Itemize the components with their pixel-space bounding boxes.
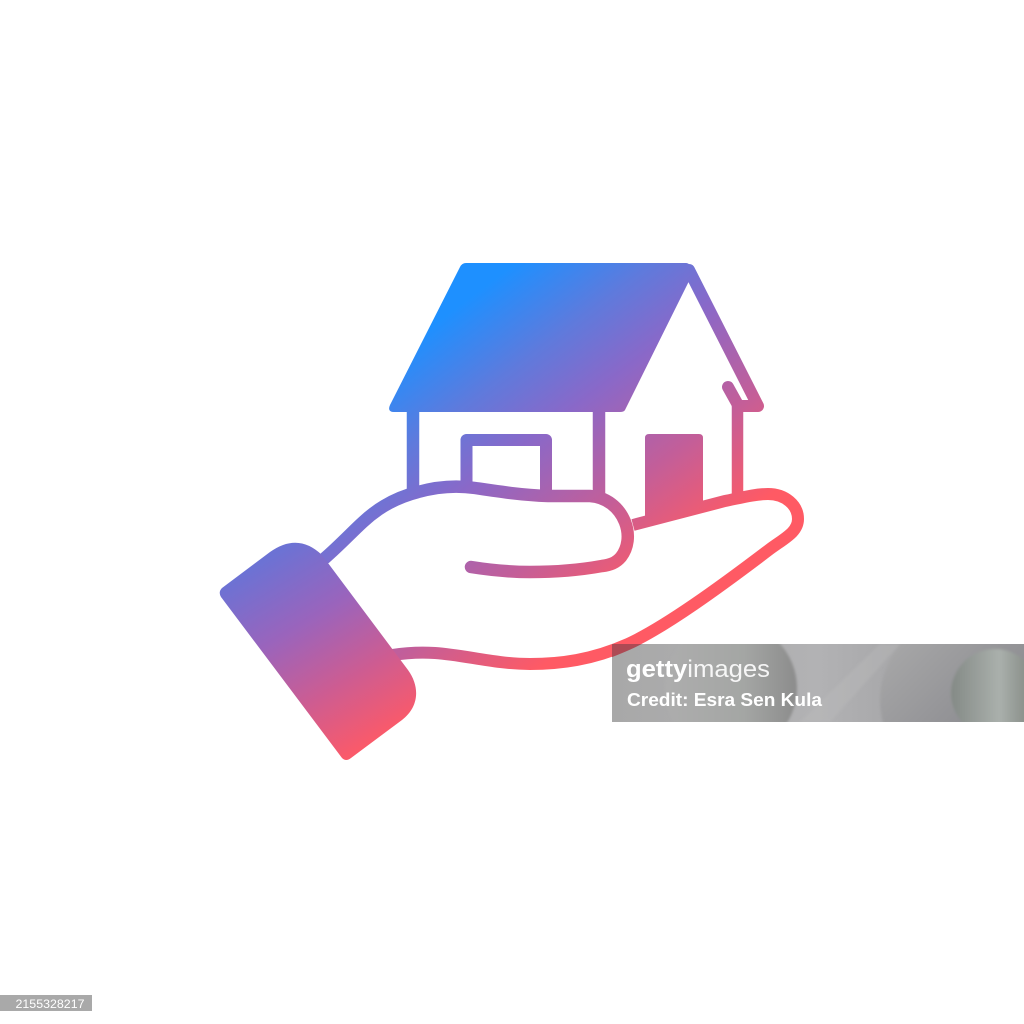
image id tag: 2155328217 [16,997,85,1011]
watermark panel [612,644,1024,722]
watermark background [612,644,1024,722]
house front door [645,434,703,520]
house roof [389,263,694,412]
watermark credit text: Credit: Esra Sen Kula [627,690,823,710]
shirt cuff [220,543,416,760]
house right gable and eave [689,270,758,406]
watermark logo text: gettyimages [626,656,770,683]
hand upper outline and thumb [325,487,628,572]
house chimney notch [728,387,738,405]
icon: hand holding house [220,263,798,760]
house middle wall [593,410,605,498]
house right wall [732,404,743,498]
house left wall [407,410,419,492]
image id tag [0,995,92,1011]
garage door frame [466,440,546,492]
hand palm and fingers outline [392,494,798,664]
